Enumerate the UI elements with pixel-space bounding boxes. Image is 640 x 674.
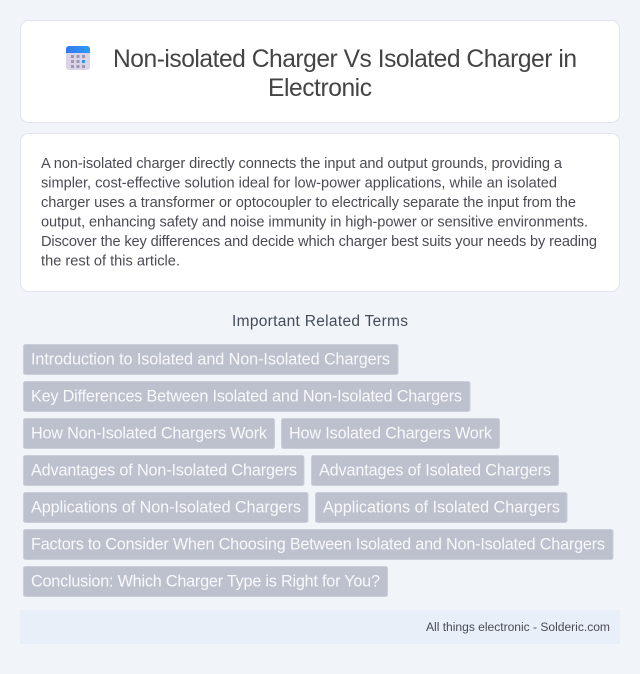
panel: related term tags <box>24 344 613 596</box>
panel: introduction paragraph: the rest of this article. <box>41 254 180 270</box>
tag: applications of non-isolated chargers <box>24 492 308 522</box>
tag: advantages of isolated chargers: Advantages of Isolated Chargers <box>319 462 551 480</box>
tag: key differences <box>24 382 470 412</box>
tag: applications of isolated chargers <box>316 492 567 522</box>
tag: factors to consider <box>24 530 613 560</box>
panel: introduction paragraph: output, enhancing safety and noise immunity in high-power or sensitive environments. <box>41 214 588 230</box>
tag: applications of non-isolated chargers: Applications of Non-Isolated Chargers <box>31 498 301 516</box>
title: Non-isolated Charger Vs Isolated Charger in <box>113 46 577 73</box>
heading: important related terms: Important Related Terms <box>232 313 408 330</box>
tag: factors to consider: Factors to Consider When Choosing Between Isolated and Non-Isolated Chargers <box>31 536 605 554</box>
tag: conclusion: Conclusion: Which Charger Type is Right for You? <box>31 572 380 590</box>
tag: advantages of isolated chargers <box>312 456 558 486</box>
panel: introduction paragraph <box>20 134 620 292</box>
tag: advantages of non-isolated chargers <box>24 456 304 486</box>
footer bar: All things electronic - Solderic.com <box>426 620 610 634</box>
tag: introduction: Introduction to Isolated and Non-Isolated Chargers <box>31 350 390 368</box>
tag: how isolated chargers work: How Isolated Chargers Work <box>289 424 493 442</box>
tag: conclusion <box>24 566 388 596</box>
tag: advantages of non-isolated chargers: Advantages of Non-Isolated Chargers <box>31 462 297 480</box>
panel: introduction paragraph: A non-isolated charger directly connects the input and output grounds, providing a <box>41 156 563 172</box>
title: Electronic <box>268 75 372 102</box>
tag: applications of isolated chargers: Applications of Isolated Chargers <box>323 498 560 516</box>
panel: introduction paragraph: charger uses a transformer or optocoupler to electrically separate the input from the <box>41 195 576 211</box>
panel: introduction paragraph: simpler, cost-effective solution ideal for low-power applications, while an isolated <box>41 176 557 192</box>
tag: how isolated chargers work <box>282 418 500 448</box>
tag: introduction <box>24 344 398 374</box>
title <box>113 46 577 102</box>
panel: header card <box>20 20 620 122</box>
footer bar <box>20 610 620 644</box>
tag: key differences: Key Differences Between Isolated and Non-Isolated Chargers <box>31 388 462 406</box>
tag: how non-isolated chargers work <box>24 418 274 448</box>
tag: how non-isolated chargers work: How Non-Isolated Chargers Work <box>31 424 268 442</box>
panel: introduction paragraph: Discover the key differences and decide which charger best suits your needs by reading <box>41 234 597 250</box>
icon: calendar <box>66 46 90 70</box>
